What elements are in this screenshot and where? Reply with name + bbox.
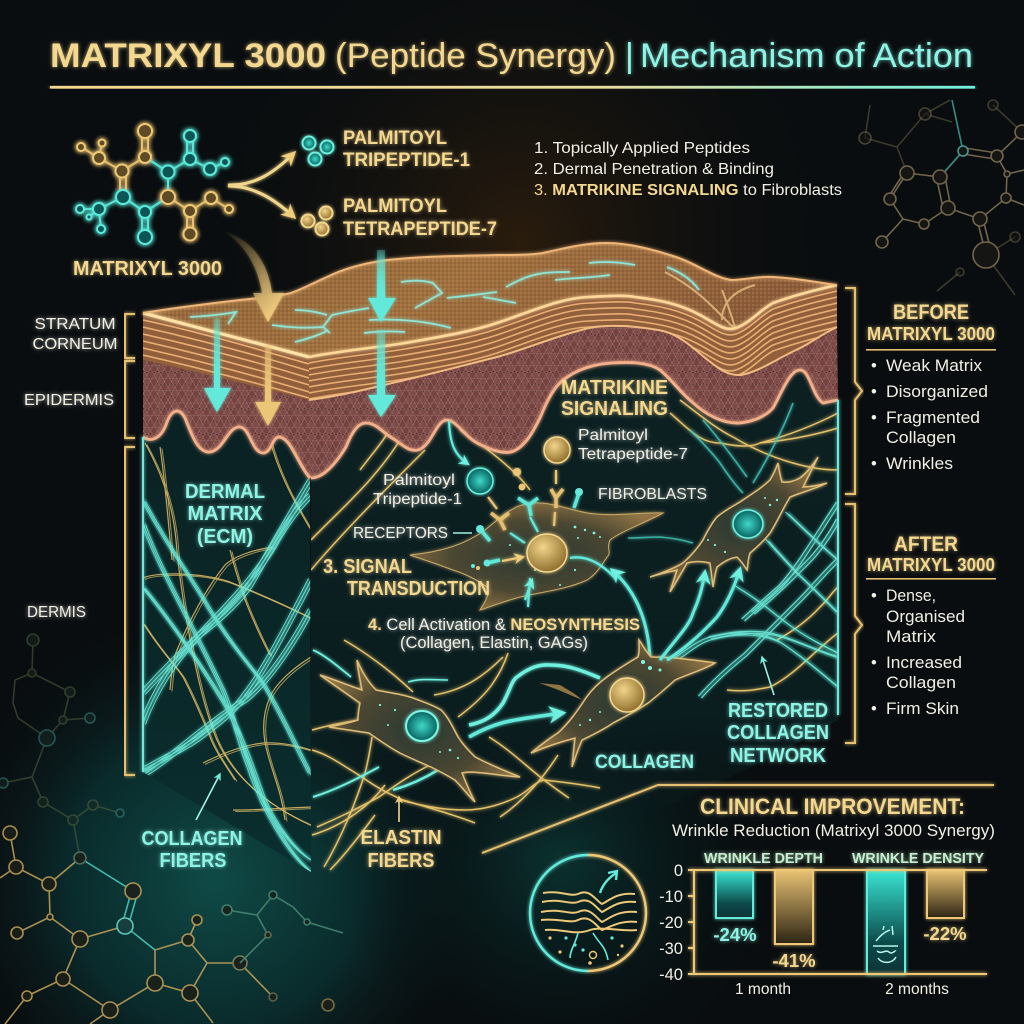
label: peptide names in cell diagram: Palmitoyl — [383, 472, 455, 489]
title — [50, 37, 973, 75]
label: dermal matrix — [185, 480, 265, 548]
arrow: teal left — [204, 318, 231, 412]
title: MATRIXYL 3000 — [50, 37, 326, 75]
value labels — [713, 923, 967, 971]
bar: depth 1 month — [716, 870, 753, 918]
steps list: 2. Dermal Penetration & Binding — [534, 161, 774, 178]
x labels: 2 months — [885, 981, 949, 998]
chart headers — [704, 851, 984, 867]
label: matrikine signaling: MATRIKINE — [561, 377, 668, 399]
value labels: -41% — [772, 950, 816, 971]
label: restored collagen network — [727, 699, 829, 767]
boundary line — [143, 363, 838, 478]
arrows: split to peptides — [228, 153, 294, 217]
list: after: • — [871, 587, 877, 605]
label: peptide names in cell diagram: Palmitoyl — [578, 427, 648, 444]
surface fold — [665, 272, 755, 327]
list: before: Fragmented — [886, 409, 980, 427]
label: collagen fibers: COLLAGEN — [142, 828, 242, 850]
list: after: Matrix — [886, 628, 937, 646]
label: matrikine signaling: SIGNALING — [561, 398, 668, 420]
x labels: 1 month — [735, 981, 791, 998]
label: palmitoyl tripeptide-1 — [343, 128, 470, 171]
pointer: elastin fibers — [398, 797, 400, 822]
list: after: • — [871, 654, 877, 672]
label: restored collagen network: RESTORED — [728, 699, 828, 722]
heading: after: AFTER — [894, 533, 958, 556]
decorative molecule: bottom left — [0, 826, 343, 1024]
label: signal transduction — [323, 556, 490, 600]
x labels — [735, 981, 949, 998]
panel: after — [866, 533, 996, 718]
signal arrows — [449, 421, 650, 658]
value labels: -22% — [923, 923, 967, 944]
label: elastin fibers: ELASTIN — [360, 827, 442, 849]
bracket: before — [845, 288, 862, 494]
heading: before: MATRIXYL 3000 — [867, 324, 995, 344]
label: restored collagen network: COLLAGEN — [727, 721, 829, 744]
axis labels — [659, 862, 683, 984]
icon in bar — [873, 926, 898, 962]
brackets: left — [125, 314, 135, 775]
label: dermal matrix: DERMAL — [185, 480, 265, 503]
label: peptide names in cell diagram — [353, 427, 707, 542]
skin surface — [143, 243, 837, 357]
label: signal transduction: TRANSDUCTION — [347, 578, 490, 600]
pointer: collagen fibers — [196, 774, 220, 820]
label: palmitoyl tetrapeptide-7: PALMITOYL — [343, 196, 447, 217]
decorative molecule: left — [0, 634, 124, 858]
arrow: gold left — [255, 345, 281, 426]
title: (Peptide Synergy) — [335, 37, 616, 75]
arrow: teal deep center — [368, 330, 396, 417]
steps list — [534, 140, 842, 199]
label: neosynthesis: 4. Cell Activation & NEOSYNTHESIS — [368, 616, 640, 634]
heading: before: BEFORE — [893, 301, 969, 324]
list: after: Organised — [886, 608, 965, 626]
icon: tripeptide cluster — [302, 136, 334, 166]
peptide spheres — [467, 468, 493, 494]
list: before: • — [871, 357, 877, 375]
collagen arrows — [469, 569, 740, 737]
title: Mechanism of Action — [640, 37, 973, 75]
dermis: left face — [140, 400, 314, 880]
fibroblast: main — [410, 421, 663, 658]
icon: skin wrinkle — [530, 855, 646, 971]
list: before: • — [871, 455, 877, 473]
list: after: • — [871, 700, 877, 718]
decorative molecule: top right — [859, 100, 1024, 295]
receptors — [480, 489, 579, 563]
label: palmitoyl tetrapeptide-7 — [343, 196, 497, 240]
label: palmitoyl tripeptide-1: TRIPEPTIDE-1 — [343, 150, 470, 171]
labels: left layer names: STRATUM — [34, 316, 116, 333]
label: peptide names in cell diagram: Tripeptide-1 — [373, 491, 462, 508]
stratum corneum: left face — [143, 314, 309, 400]
steps list: 3. MATRIKINE SIGNALING to Fibroblasts — [534, 182, 842, 199]
steps list: 1. Topically Applied Peptides — [534, 140, 750, 157]
panel: clinical improvement — [482, 785, 995, 998]
axis labels: -10 — [659, 888, 683, 906]
list: before: Collagen — [886, 429, 956, 447]
left and right edges — [143, 400, 838, 772]
bar: density 2 months — [927, 870, 964, 918]
skin block — [140, 243, 845, 890]
pointer: receptors — [453, 532, 472, 534]
stratum corneum: right face — [309, 286, 837, 399]
label: collagen: COLLAGEN — [595, 752, 694, 773]
pointer: restored collagen — [762, 657, 774, 695]
list: before: Disorganized — [886, 383, 988, 401]
heading: clinical improvement: CLINICAL IMPROVEMENT: — [700, 794, 965, 819]
label: collagen fibers: FIBERS — [160, 850, 226, 872]
label: elastin fibers — [360, 827, 442, 872]
fibroblast: upper right — [650, 457, 827, 592]
label: dermal matrix: MATRIX — [188, 502, 263, 525]
labels: left layer names: CORNEUM — [32, 336, 118, 353]
labels: left layer names: EPIDERMIS — [24, 392, 114, 409]
list: after: Firm Skin — [886, 700, 959, 718]
subheading: Wrinkle Reduction (Matrixyl 3000 Synergy) — [672, 821, 995, 840]
label: signal transduction: 3. SIGNAL — [323, 556, 412, 578]
list: after: Collagen — [886, 674, 956, 692]
chart headers: WRINKLE DENSITY — [852, 851, 984, 867]
list: after: Dense, — [886, 587, 936, 605]
list: after — [871, 587, 965, 718]
label: palmitoyl tripeptide-1: PALMITOYL — [343, 128, 447, 149]
title: | — [625, 37, 634, 75]
axis labels: 0 — [674, 862, 683, 880]
label: matrikine signaling — [561, 377, 668, 420]
label: palmitoyl tetrapeptide-7: TETRAPEPTIDE-7 — [343, 219, 497, 240]
value labels: -24% — [713, 924, 757, 945]
nucleus — [527, 534, 567, 572]
list: before: • — [871, 409, 877, 427]
heading: after — [867, 533, 995, 575]
label: neosynthesis — [368, 616, 640, 652]
arrow: big gold into skin — [225, 232, 284, 322]
panel: before — [866, 301, 996, 473]
axis labels: -30 — [659, 940, 683, 958]
list: before: Wrinkles — [886, 455, 953, 473]
label: collagen fibers — [142, 828, 242, 872]
list: before — [871, 357, 988, 473]
arrow: teal from tetrapeptide — [368, 250, 396, 322]
label: peptide names in cell diagram: FIBROBLASTS — [598, 486, 707, 503]
fibroblast: lower centre — [531, 640, 715, 767]
heading: after: MATRIXYL 3000 — [867, 555, 995, 575]
list: before: Weak Matrix — [886, 357, 983, 375]
label: Matrixyl 3000: MATRIXYL 3000 — [73, 258, 222, 280]
labels: left layer names: DERMIS — [27, 604, 86, 621]
surface cracks — [190, 262, 699, 342]
dermis: right face — [311, 360, 840, 890]
label: restored collagen network: NETWORK — [730, 744, 826, 767]
bar: depth 2 months — [775, 870, 813, 944]
fibroblast: lower left — [320, 660, 520, 802]
label: elastin fibers: FIBERS — [368, 850, 434, 872]
label: neosynthesis: (Collagen, Elastin, GAGs) — [400, 634, 588, 652]
epidermis: right face — [309, 326, 838, 478]
icon: tetrapeptide cluster — [302, 206, 332, 236]
surface edges — [143, 243, 837, 357]
list: before: • — [871, 383, 877, 401]
molecule: Matrixyl 3000 — [76, 124, 233, 244]
label: peptide names in cell diagram: RECEPTORS — [353, 525, 448, 542]
label: dermal matrix: (ECM) — [197, 525, 253, 548]
chart headers: WRINKLE DEPTH — [704, 851, 823, 867]
axis labels: -20 — [659, 914, 683, 932]
axis labels: -40 — [659, 966, 683, 984]
bar: density 1 month — [867, 870, 905, 974]
label: peptide names in cell diagram: Tetrapeptide-7 — [578, 446, 688, 463]
epidermis: left face — [143, 360, 309, 478]
labels: left layer names — [24, 316, 118, 621]
list: after: Increased — [886, 654, 962, 672]
bracket: after — [845, 504, 862, 743]
bar chart — [659, 862, 987, 998]
front vertical edge — [310, 358, 312, 872]
heading: before — [867, 301, 995, 344]
